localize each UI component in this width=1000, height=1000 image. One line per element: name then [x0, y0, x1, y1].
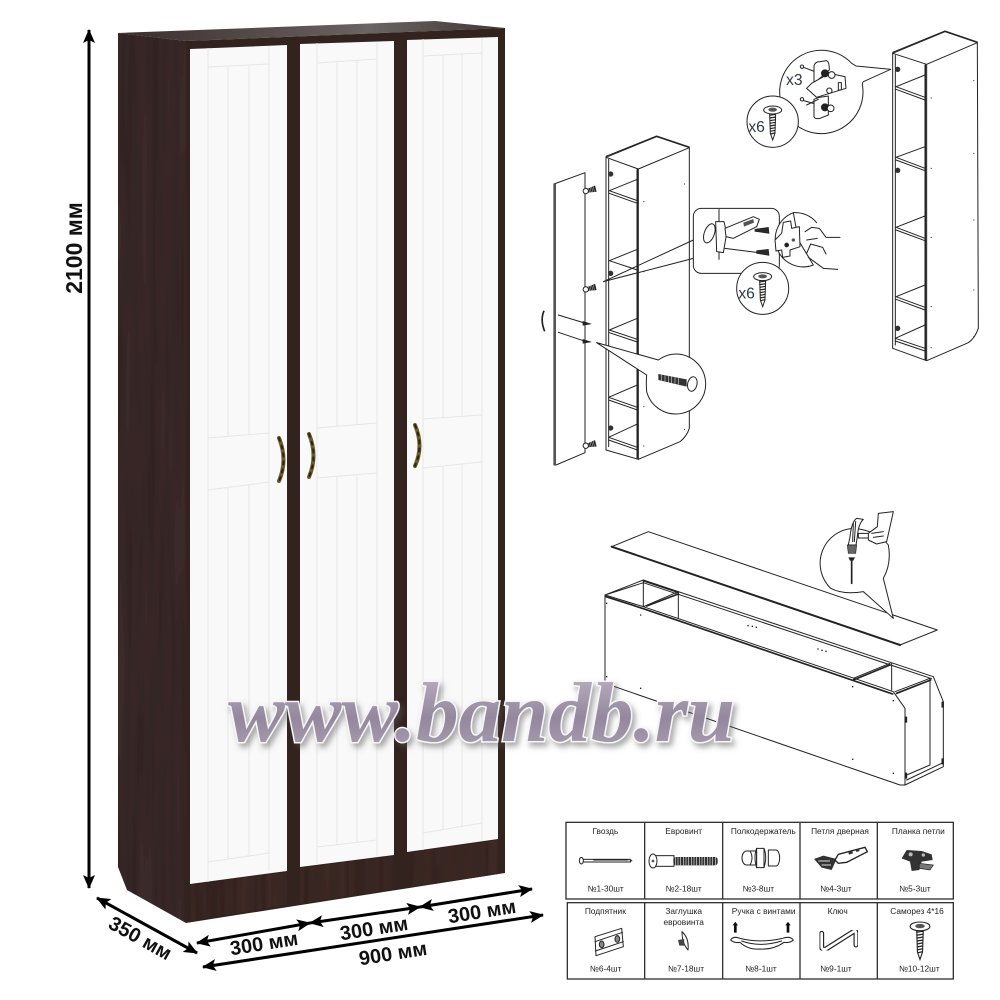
callout: plate with hand — [775, 213, 840, 269]
callout: hammer and nail — [820, 512, 893, 618]
handle 2 — [309, 434, 314, 477]
callout: hinge plate x3 — [780, 50, 891, 134]
hardware labels: №3-8шт — [743, 883, 774, 893]
assembly diagram: back panel nailing — [605, 512, 943, 785]
door width label 1: 300 мм — [229, 928, 300, 960]
watermark: www.bandb.ru — [228, 666, 735, 760]
depth dimension arrow — [97, 898, 197, 953]
icon: hinge plate — [902, 850, 933, 871]
door width arrow 3 — [420, 889, 532, 907]
wardrobe side panel — [118, 33, 186, 923]
door 2 — [300, 41, 394, 867]
wardrobe top face — [118, 21, 505, 41]
height dimension arrow — [88, 30, 90, 888]
table grid — [566, 822, 953, 979]
door width label 3: 300 мм — [447, 896, 518, 928]
back panel — [612, 532, 937, 645]
hardware labels: Планка петли — [892, 826, 945, 836]
door 1 — [190, 45, 287, 884]
hardware labels: Полкодержатель — [731, 826, 796, 836]
wardrobe front frame — [186, 28, 505, 923]
icon: euro screw — [649, 854, 718, 868]
hardware labels: №7-18шт — [668, 963, 704, 973]
total width arrow — [203, 915, 543, 967]
hardware table — [566, 822, 953, 979]
hardware labels: Петля дверная — [811, 826, 869, 836]
height label: 2100 мм — [61, 202, 87, 294]
hardware labels: Подпятник — [585, 906, 626, 916]
hardware labels — [585, 826, 945, 973]
callout: hinge mounting — [603, 208, 779, 282]
assembly diagrams: cabinets and door — [542, 31, 978, 465]
hardware labels: №8-1шт — [745, 963, 777, 973]
hardware labels: Заглушка — [665, 906, 702, 916]
icon: self-tapping screw — [910, 922, 930, 959]
hardware labels: №2-18шт — [666, 883, 702, 893]
door panel with hinges — [554, 173, 597, 465]
hardware labels: Ключ — [828, 906, 848, 916]
left cabinet — [606, 136, 689, 459]
plinth panels — [190, 840, 498, 921]
hardware labels: №6-4шт — [590, 963, 622, 973]
door 3 — [407, 37, 498, 852]
hardware labels: Саморез 4*16 — [890, 906, 944, 916]
hardware labels: №9-1шт — [820, 963, 852, 973]
hardware labels: Ручка с винтами — [732, 906, 796, 916]
door handle — [542, 311, 545, 331]
lying cabinet — [605, 580, 943, 785]
handle 3 — [415, 425, 420, 466]
hardware labels: №10-12шт — [899, 963, 940, 973]
hardware labels: №4-3шт — [820, 883, 852, 893]
icon: bracket — [595, 928, 623, 956]
handle 1 — [279, 438, 284, 481]
hardware labels: №1-30шт — [588, 883, 624, 893]
icon: nail — [579, 857, 633, 864]
callout: screws x6 upper — [747, 96, 798, 147]
hardware labels: Евровинт — [665, 826, 702, 836]
icon: shelf pin — [742, 848, 780, 868]
hardware labels: евровинта — [663, 917, 704, 927]
icon: screw cap — [678, 932, 688, 950]
callout: screws x6 upper: x6 — [748, 119, 765, 136]
door width arrow 1 — [197, 923, 310, 943]
depth label: 350 мм — [105, 913, 175, 965]
callout: bolt — [597, 343, 706, 414]
icon: handle with screws — [731, 922, 793, 949]
door width label 2: 300 мм — [339, 913, 410, 945]
callout: screws x6 lower: x6 — [738, 285, 755, 302]
door width arrow 2 — [310, 907, 420, 923]
callout: screws x6 lower — [737, 262, 789, 314]
callout: hinge plate x3: x3 — [786, 72, 803, 89]
right cabinet — [893, 31, 978, 361]
icon: door hinge — [814, 847, 867, 870]
hardware labels: №5-3шт — [899, 883, 931, 893]
icon: hex key — [822, 931, 856, 949]
total width label: 900 мм — [358, 938, 429, 970]
hardware labels: Гвоздь — [592, 826, 618, 836]
wardrobe — [118, 21, 505, 923]
